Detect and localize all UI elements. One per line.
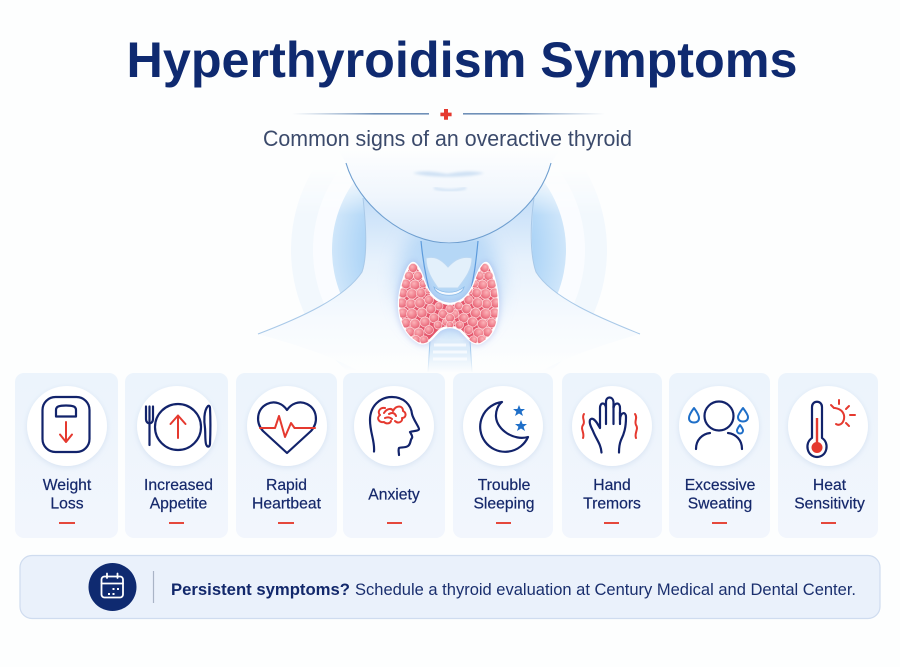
card: Heat Sensitivity <box>778 373 878 538</box>
icon: crescent moon and stars <box>480 402 528 452</box>
icon: calendar <box>88 563 136 611</box>
label: Trouble <box>478 477 531 494</box>
card: Excessive Sweating <box>669 373 770 538</box>
icon: thermometer and sun <box>807 400 855 457</box>
label: Heartbeat <box>252 496 322 512</box>
icon: head with tangled brain <box>370 397 419 455</box>
card: Trouble Sleeping <box>453 373 553 538</box>
icon: trembling hand <box>582 398 637 452</box>
illustration: neck and thyroid <box>258 162 640 371</box>
label: Excessive <box>685 477 756 494</box>
label: Sensitivity <box>794 496 865 512</box>
label: Anxiety <box>368 486 420 504</box>
card: Weight Loss <box>15 373 118 538</box>
card: Anxiety <box>343 373 445 538</box>
title: Hyperthyroidism Symptoms <box>126 32 798 88</box>
label: Tremors <box>583 496 641 512</box>
label: Sleeping <box>473 496 535 512</box>
label: Weight <box>43 477 92 494</box>
banner text: Persistent symptoms? <box>171 581 350 599</box>
call to action banner <box>20 556 880 618</box>
neck and shoulders <box>257 198 640 372</box>
card: Hand Tremors <box>562 373 662 538</box>
thyroid gland <box>397 263 500 344</box>
face and jaw <box>338 150 560 243</box>
subtitle: Common signs of an overactive thyroid <box>263 126 632 151</box>
card: Increased Appetite <box>125 373 228 538</box>
label: Heat <box>813 477 847 494</box>
banner text: Schedule a thyroid evaluation at Century Medical and Dental Center. <box>355 581 856 599</box>
label: Appetite <box>150 496 208 512</box>
bottom fade <box>250 350 650 373</box>
icon: heart with ecg line <box>258 402 316 453</box>
label: Rapid <box>266 477 307 494</box>
divider with medical cross <box>292 109 605 120</box>
halo behind neck <box>291 182 607 314</box>
label: Loss <box>50 496 84 512</box>
icon: person with sweat drops <box>689 402 748 449</box>
icon: scale with down arrow <box>42 397 90 452</box>
label: Increased <box>144 477 213 494</box>
larynx and trachea <box>421 241 478 372</box>
label: Hand <box>593 477 631 494</box>
label: Sweating <box>688 496 752 512</box>
icon: plate with fork and knife <box>146 404 210 450</box>
card: Rapid Heartbeat <box>236 373 337 538</box>
